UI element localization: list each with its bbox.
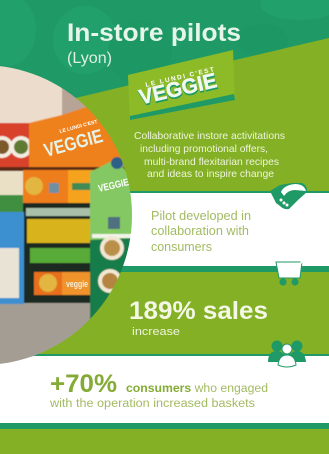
- stat: 189% sales: 189% sales: [129, 297, 268, 325]
- title: In-store pilots: [67, 19, 241, 47]
- pilot text: Pilot developed in: [151, 209, 251, 223]
- white band: consumers: [0, 354, 329, 429]
- pilot text: consumers: [151, 240, 212, 254]
- banner text: Veggie: VEGGIE: [97, 177, 130, 195]
- icon: people group: [268, 340, 306, 367]
- subtitle: (Lyon): [67, 50, 112, 67]
- description text: and ideas to inspire change: [147, 169, 274, 180]
- description text: including promotional offers,: [140, 144, 268, 155]
- description text: Collaborative instore activitations: [134, 131, 285, 142]
- icon: handshake: [270, 183, 307, 209]
- white band: pilot developed: [0, 191, 329, 272]
- icon: shopping cart: [276, 258, 308, 286]
- pilot text: [151, 209, 251, 254]
- logo banner: Le lundi c'est Veggie: VEGGIE: [137, 69, 219, 109]
- consumers text: with the operation increased baskets: [49, 398, 255, 410]
- description text: multi-brand flexitarian recipes: [144, 157, 279, 168]
- logo banner: Le lundi c'est Veggie: LE LUNDI C'EST: [145, 66, 215, 89]
- photo sign text: Veggie: LE LUNDI C'EST: [59, 119, 98, 135]
- background: green header with leaf shapes: [0, 0, 329, 98]
- store photo in circle: [0, 66, 132, 364]
- stat label: increase: increase: [132, 326, 180, 338]
- pilot text: collaboration with: [151, 224, 249, 238]
- consumers text: consumers who engaged: [126, 383, 268, 395]
- stat: +70%: +70%: [50, 370, 117, 398]
- photo shelf sign text: veggie: veggie: [66, 279, 88, 289]
- logo banner: Le lundi c'est Veggie: VEGGIE: [137, 71, 220, 111]
- logo banner: Le lundi c'est Veggie: [128, 50, 235, 120]
- description text: [134, 131, 285, 180]
- photo sign text: Veggie: VEGGIE: [42, 126, 105, 162]
- consumers text: [49, 383, 268, 410]
